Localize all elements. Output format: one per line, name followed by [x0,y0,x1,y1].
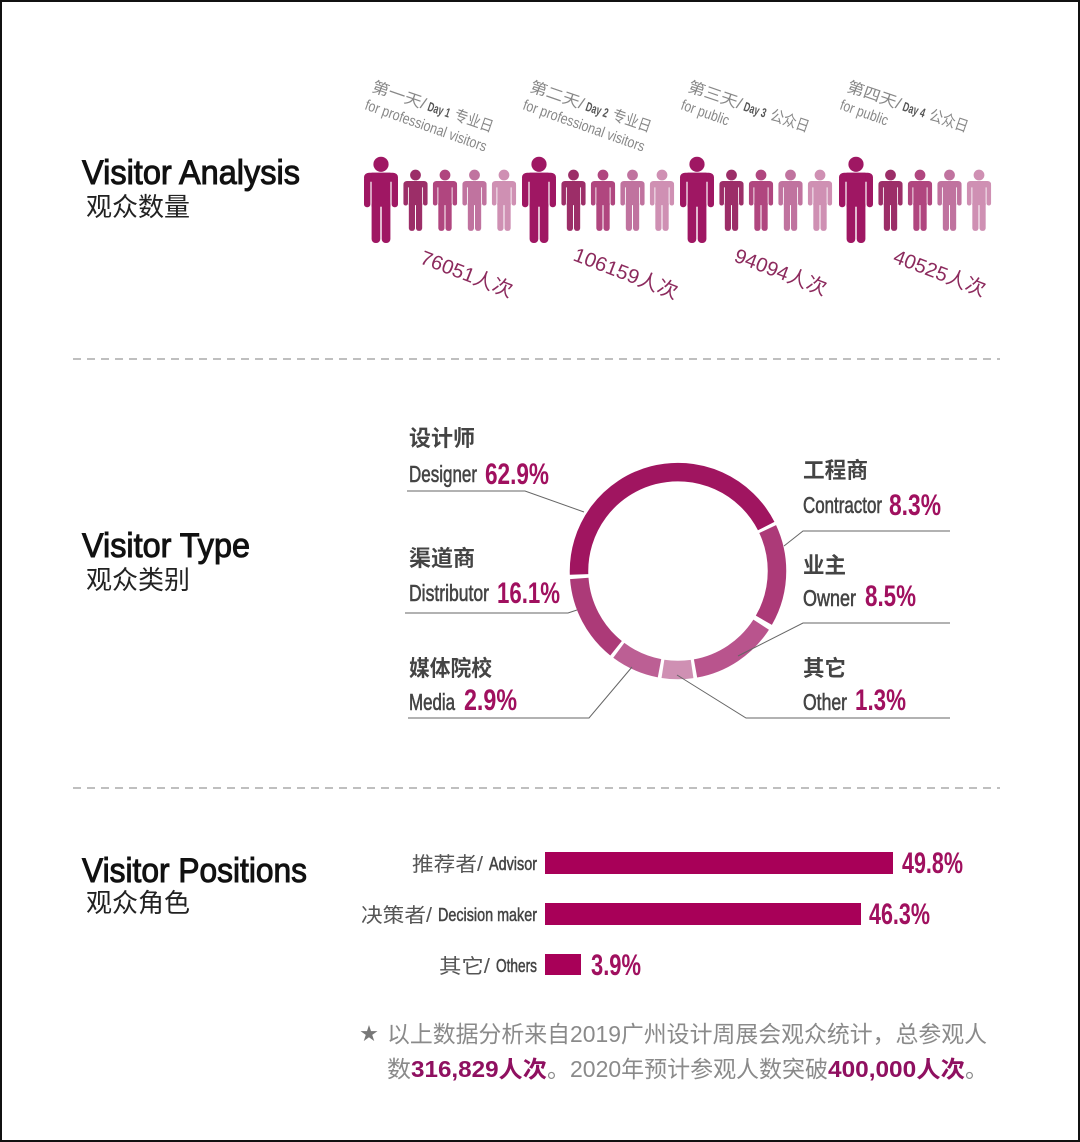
title: Visitor Analysis: Visitor Analysis [82,154,300,192]
day 2 label [521,78,654,155]
day 2 label: 专业日 [610,106,654,136]
day 1 label: Day 1 [426,99,452,121]
donut chart: visitor type [579,472,777,670]
day 1 label [363,78,496,155]
bar chart: visitor positions [361,847,963,982]
label: owner: Owner [803,585,856,611]
number: day 2 visitors: 106159人次 [570,243,681,304]
label: contractor [803,458,941,522]
number: day 3 visitors: 94094人次 [731,244,830,300]
label: contractor: Contractor [803,492,882,518]
label: media: 2.9% [464,684,517,717]
label: designer: 62.9% [485,458,549,491]
footnote [360,1021,988,1082]
footnote: 数 [387,1056,411,1082]
title: Visitor Type: Visitor Type [82,527,250,565]
footnote: 。 [547,1056,570,1082]
bar: others [439,949,641,982]
day 4 label: 第四天/ [845,78,904,113]
label: owner [803,553,916,613]
bar: others: Others [496,956,537,976]
label: distributor [409,546,560,610]
day 2 label: Day 2 [584,99,610,121]
footnote: 316,829人次 [411,1056,547,1082]
title: Visitor Positions: Visitor Positions [82,852,307,890]
day 2 label: 第二天/ [528,78,587,113]
section: visitor type heading [82,527,250,595]
label: other [803,656,906,717]
label: media: Media [409,689,455,715]
label: designer: 设计师 [409,426,475,451]
day 1 label: 专业日 [452,106,496,136]
bar: advisor: Advisor [489,854,537,874]
footnote: 。 [965,1056,988,1082]
label: designer [409,426,549,491]
day 3 label: 公众日 [768,106,812,136]
section: visitor analysis heading [82,154,300,222]
section: visitor positions heading [82,852,307,918]
label: distributor: 渠道商 [409,546,475,571]
bar: advisor: 49.8% [902,847,963,880]
footnote: 400,000人次 [828,1056,965,1082]
day 3 label: for public [679,97,732,130]
day 1 label: for professional visitors [363,97,489,155]
subtitle: 观众类别: 观众类别 [86,565,190,595]
day 3 label: Day 3 [742,99,768,121]
label: contractor: 8.3% [889,489,941,522]
footnote: 2020年预计参观人数突破 [570,1056,828,1082]
bar: others: 3.9% [591,949,641,982]
leader lines [405,491,950,718]
label: media: 媒体院校 [409,656,492,681]
label: owner: 业主 [803,553,846,578]
label: distributor: 16.1% [497,577,560,610]
day 3 label: 第三天/ [686,78,745,113]
icon row: day 3 people [680,157,832,243]
day 4 label: 公众日 [927,106,971,136]
number: day 4 visitors: 40525人次 [890,245,989,301]
bar: decision maker: 决策者/ [361,904,432,927]
footnote: 以上数据分析来自2019广州设计周展会观众统计，总参观人 [387,1021,987,1047]
day 4 label: Day 4 [901,99,928,121]
label: contractor: 工程商 [803,458,868,483]
bar: decision maker [361,898,930,931]
day 1 label: 第一天/ [370,78,429,113]
label: distributor: Distributor [409,580,489,606]
label: other: 其它 [803,656,846,681]
label: designer: Designer [409,461,477,487]
day 4 label [838,78,971,136]
icon row: day 1 people [364,157,516,243]
footnote: ★ [360,1024,378,1044]
label: other: 1.3% [855,684,906,717]
subtitle: 观众角色: 观众角色 [86,888,190,918]
number: day 1 visitors: 76051人次 [417,246,516,302]
bar: others: 其它/ [439,955,490,978]
bar: decision maker: 46.3% [869,898,930,931]
label: other: Other [803,689,847,715]
icon row: day 2 people [522,157,674,243]
bar: advisor [412,847,963,880]
subtitle: 观众数量: 观众数量 [86,192,190,222]
icon row: day 4 people [839,157,991,243]
day 2 label: for professional visitors [521,97,647,155]
label: media [409,656,517,717]
label: owner: 8.5% [865,580,916,613]
bar: decision maker: Decision maker [438,905,537,925]
bar: advisor: 推荐者/ [412,853,483,876]
day 4 label: for public [838,97,891,130]
day 3 label [679,78,812,136]
